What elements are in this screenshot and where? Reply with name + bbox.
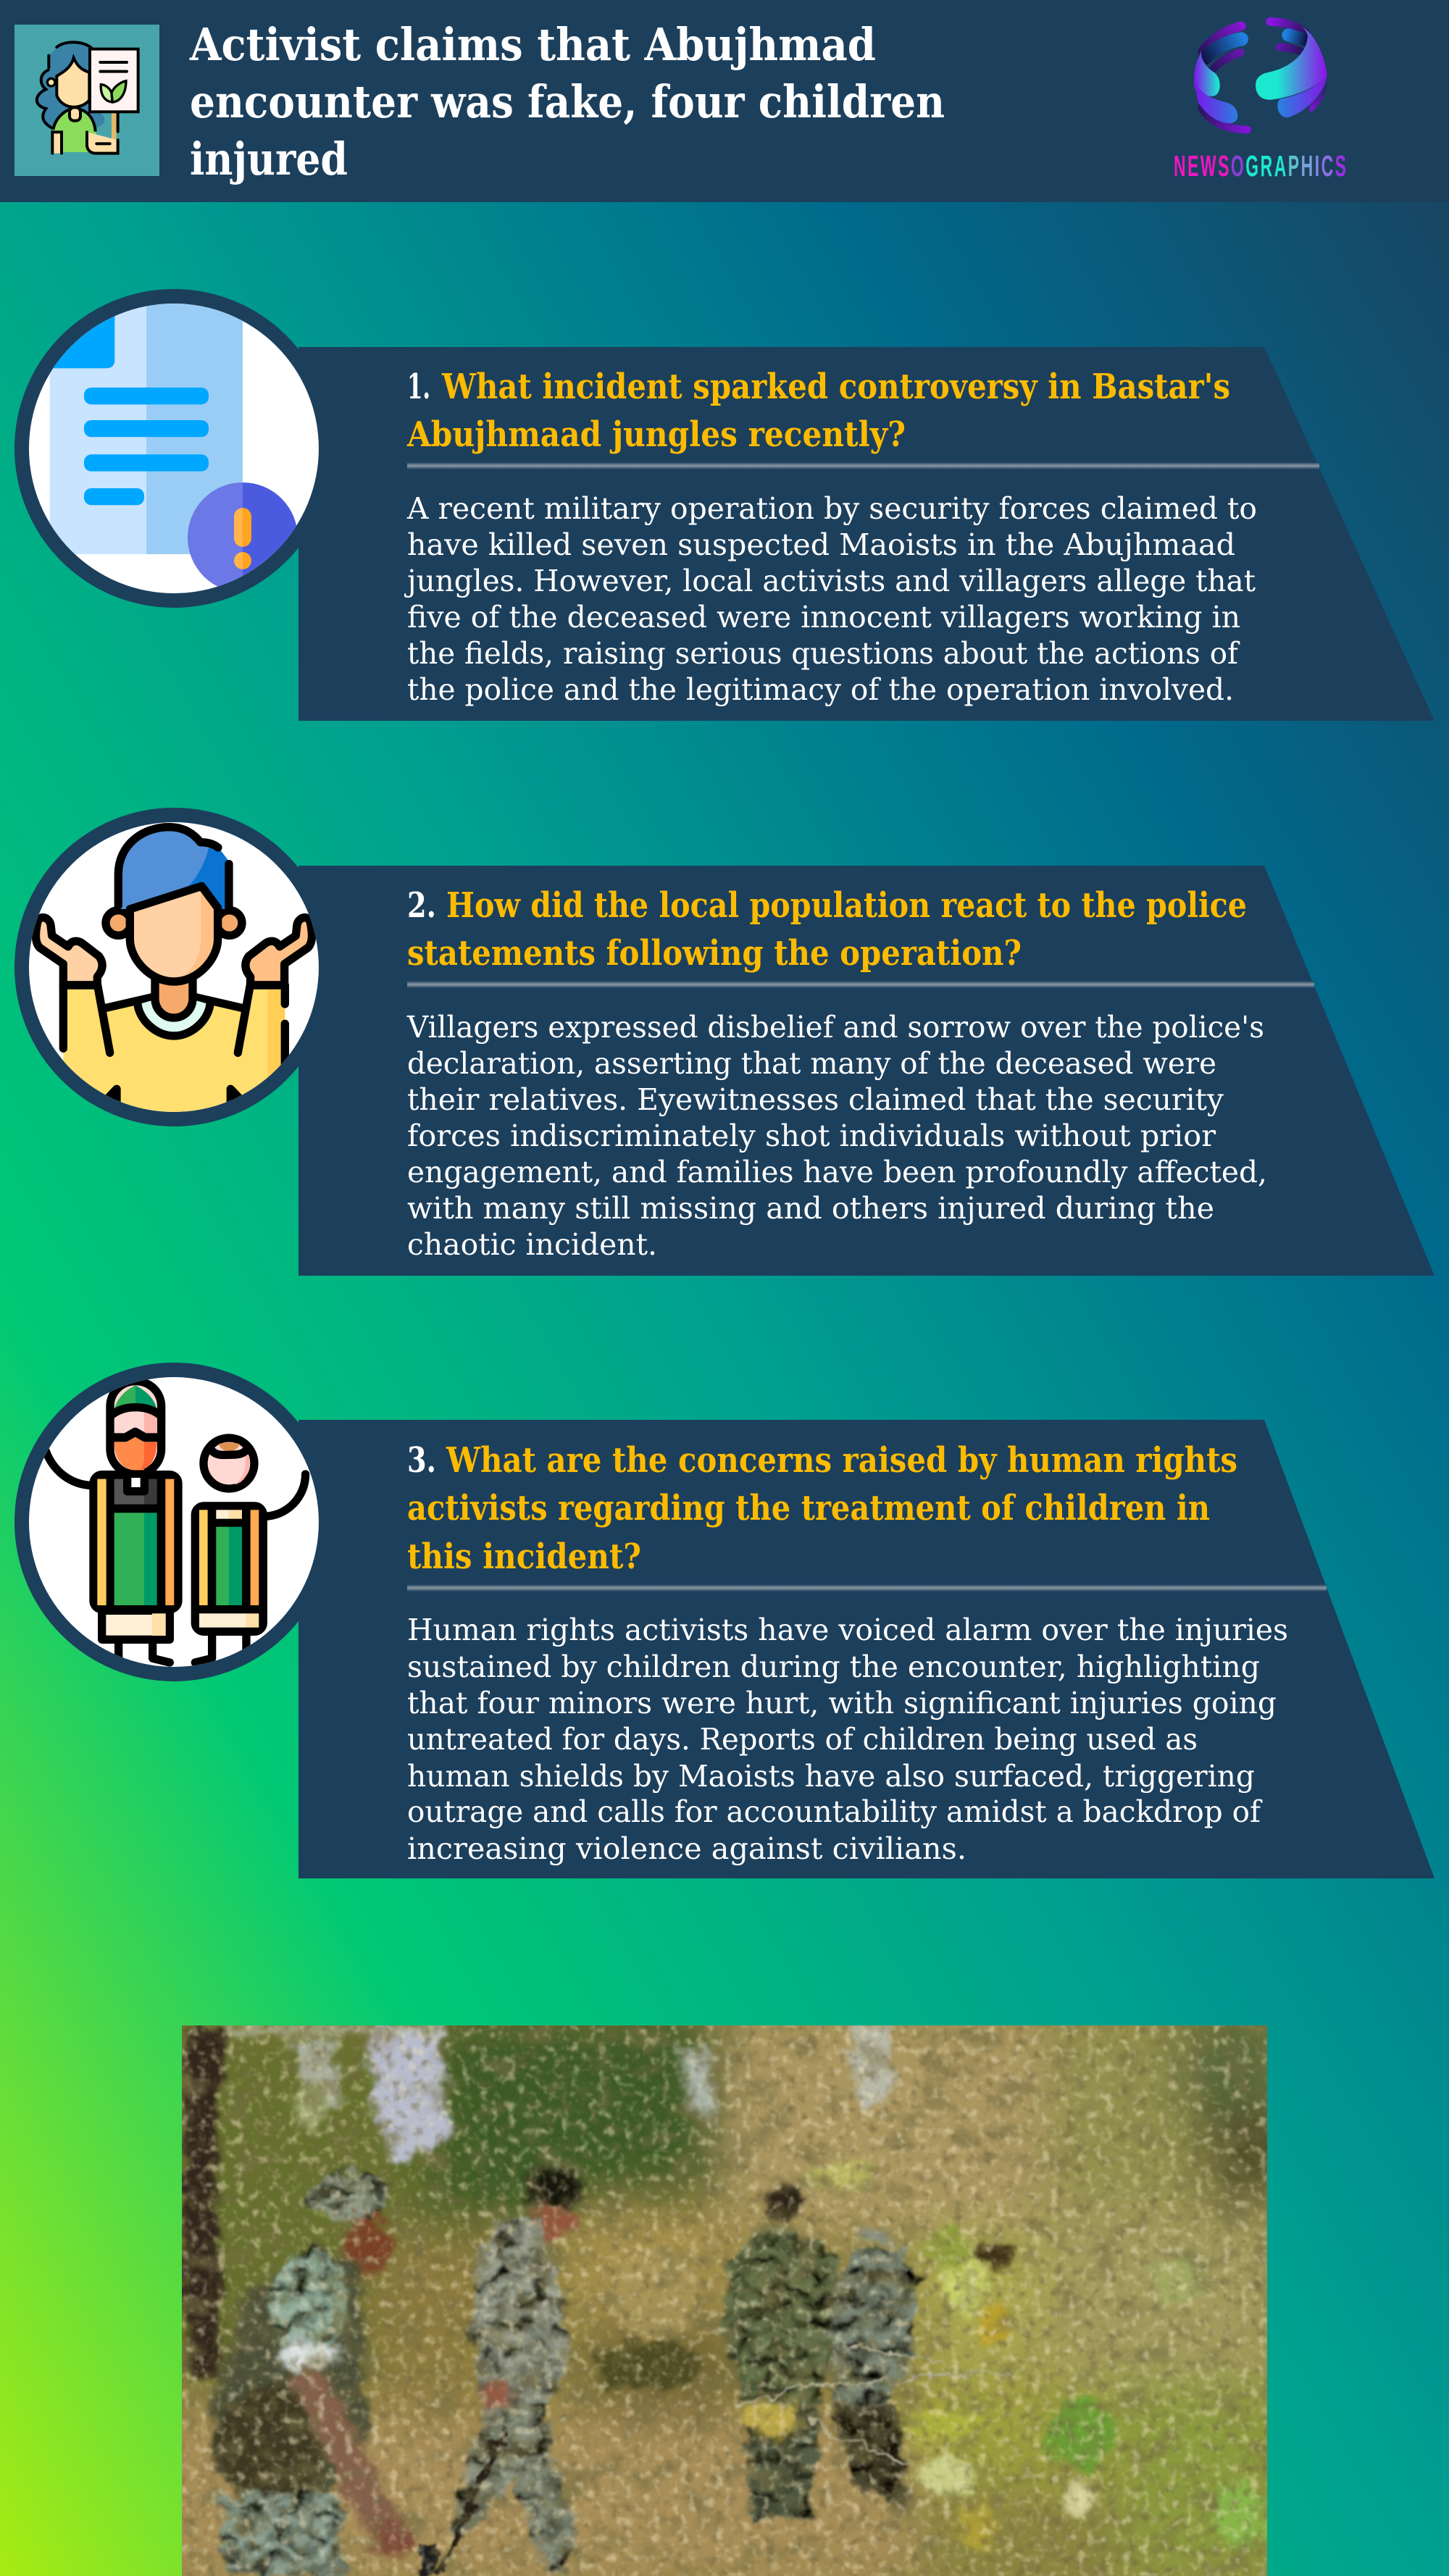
question 2 heading: How did the local population react to the police bbox=[446, 885, 1247, 926]
forest background colour masses bbox=[159, 2014, 1291, 2576]
photo: soldiers patrolling in the forest bbox=[159, 2014, 1291, 2576]
soldiers bbox=[212, 2169, 917, 2576]
foreground yellow leaves bbox=[736, 2401, 803, 2438]
title: Activist claims that Abujhmad bbox=[189, 18, 876, 71]
sky gaps, trunk and leaf clusters bbox=[182, 2026, 1266, 2552]
answer 2 text: their relatives. Eyewitnesses claimed that the security bbox=[407, 1082, 1224, 1117]
panel: question 3 bbox=[298, 1420, 1435, 1878]
question 3 heading: What are the concerns raised by human rights bbox=[446, 1440, 1237, 1481]
panel: question 1 bbox=[298, 347, 1435, 721]
title: encounter was fake, four children bbox=[190, 75, 945, 128]
title bbox=[189, 18, 945, 185]
answer 3 text: that four minors were hurt, with significant injuries going bbox=[407, 1686, 1277, 1720]
answer 1 text: A recent military operation by security forces claimed to bbox=[406, 491, 1257, 526]
question 3 heading: 3. bbox=[407, 1440, 436, 1481]
answer 3 text: Human rights activists have voiced alarm over the injuries bbox=[407, 1613, 1288, 1647]
answer 2 text: declaration, asserting that many of the deceased were bbox=[407, 1046, 1216, 1081]
question 3 heading: this incident? bbox=[407, 1536, 641, 1577]
soldier 2 bbox=[440, 2169, 583, 2576]
icon: activist holding sign bbox=[14, 25, 159, 176]
answer 3 text: human shields by Maoists have also surfaced, triggering bbox=[407, 1759, 1255, 1794]
answer 2 text: forces indiscriminately shot individuals without prior bbox=[407, 1118, 1216, 1153]
question 1 heading bbox=[406, 367, 1230, 455]
question 1 heading: 1. bbox=[407, 367, 430, 407]
answer 2 text: engagement, and families have been profoundly affected, bbox=[407, 1155, 1267, 1189]
photo leaf texture bbox=[182, 2025, 1267, 2576]
icon: document with alert bbox=[14, 289, 333, 608]
question 3 heading: activists regarding the treatment of children in bbox=[407, 1488, 1210, 1529]
question 3 heading bbox=[407, 1440, 1237, 1577]
answer 1 text: the fields, raising serious questions about the actions of bbox=[407, 636, 1240, 671]
answer 1 text: five of the deceased were innocent villagers working in bbox=[407, 600, 1240, 635]
answer 2 text: chaotic incident. bbox=[407, 1227, 657, 1262]
icon: adult and child bbox=[14, 1363, 333, 1681]
question 2 heading: statements following the operation? bbox=[407, 933, 1022, 974]
answer 2 text: Villagers expressed disbelief and sorrow over the police's bbox=[406, 1010, 1264, 1045]
answer 2 text: with many still missing and others injured during the bbox=[407, 1191, 1214, 1226]
answer 3 text: untreated for days. Reports of children being used as bbox=[407, 1722, 1198, 1757]
logo globe mark bbox=[1194, 22, 1327, 130]
answer 1 text bbox=[404, 491, 1257, 707]
forest scene bbox=[159, 2014, 1291, 2576]
section 1 bbox=[14, 289, 1435, 721]
panel: question 2 bbox=[298, 866, 1435, 1276]
answer 3 text: sustained by children during the encounter, highlighting bbox=[407, 1649, 1260, 1684]
answer 3 text bbox=[407, 1613, 1288, 1866]
question 1 heading: What incident sparked controversy in Bastar's bbox=[441, 367, 1230, 407]
logo: NEWSOGRAPHICS bbox=[1174, 22, 1346, 183]
soldier 1 bbox=[212, 2170, 430, 2576]
answer 1 text: jungles. However, local activists and villagers allege that bbox=[404, 564, 1256, 598]
soldier 3 bbox=[722, 2187, 847, 2522]
title: injured bbox=[190, 133, 348, 185]
question 2 heading bbox=[407, 885, 1247, 974]
section 2 bbox=[14, 808, 1435, 1276]
header bar bbox=[0, 0, 1449, 202]
soldier 4 bbox=[829, 2225, 917, 2512]
question 2 heading: 2. bbox=[407, 885, 436, 926]
answer 2 text bbox=[406, 1010, 1267, 1262]
answer 3 text: increasing violence against civilians. bbox=[407, 1831, 966, 1866]
foreground branch bbox=[736, 2347, 1010, 2464]
answer 1 text: have killed seven suspected Maoists in the Abujhmaad bbox=[407, 527, 1235, 562]
question 1 heading: Abujhmaad jungles recently? bbox=[406, 414, 906, 455]
answer 3 text: outrage and calls for accountability amidst a backdrop of bbox=[407, 1794, 1263, 1829]
logo wordmark: NEWSOGRAPHICS bbox=[1174, 150, 1346, 183]
icon: man shrugging bbox=[14, 808, 333, 1126]
answer 1 text: the police and the legitimacy of the operation involved. bbox=[407, 672, 1234, 707]
section 3 bbox=[14, 1363, 1435, 1878]
